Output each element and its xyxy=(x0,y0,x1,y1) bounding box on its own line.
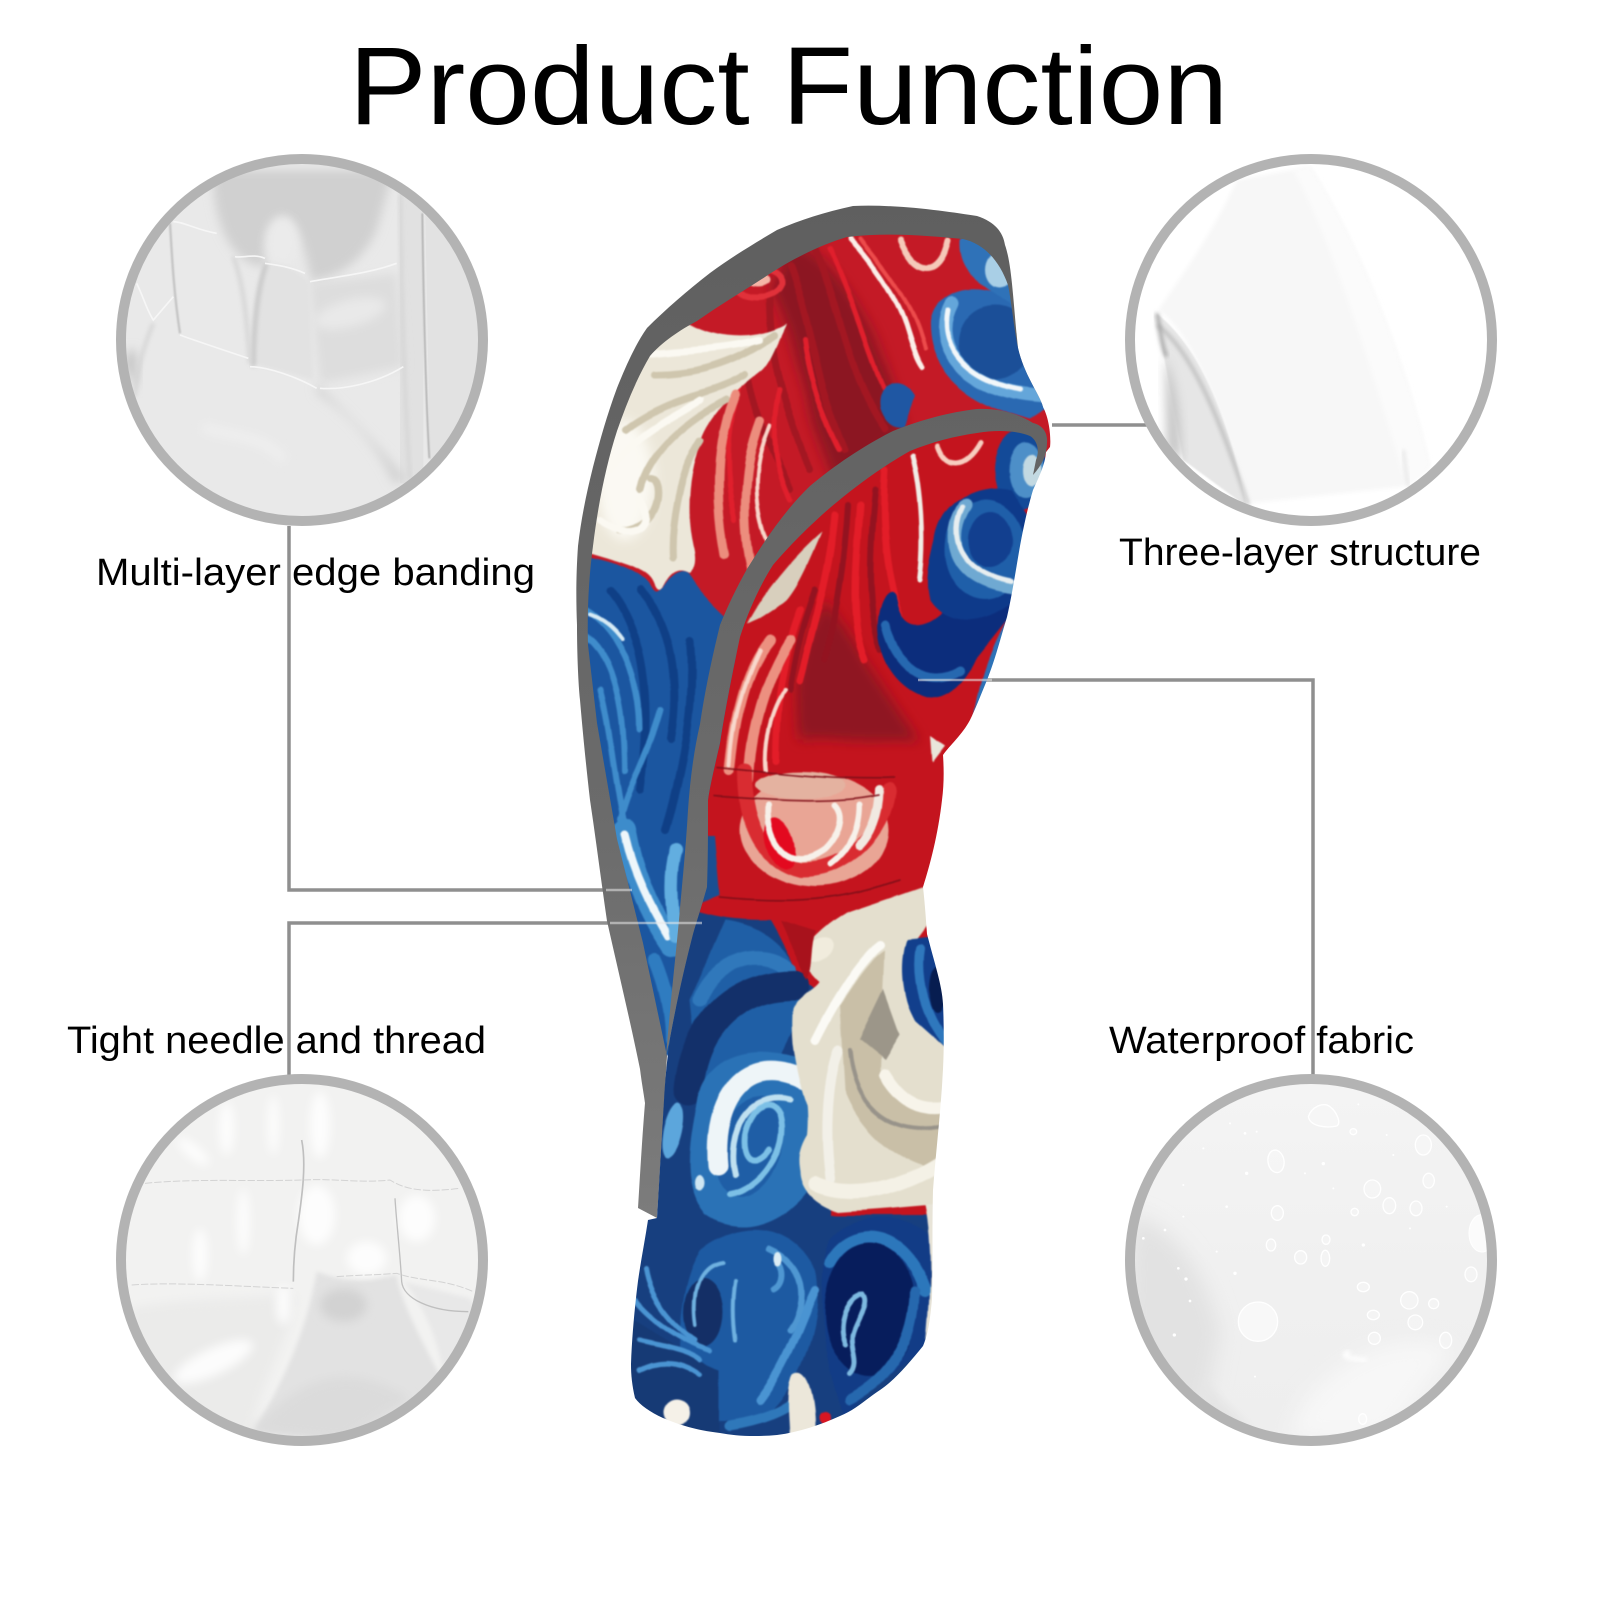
label: multi-layer edge banding: Multi-layer edge banding xyxy=(96,552,535,594)
back panel edge band xyxy=(576,206,1043,1218)
detail circle: multi-layer edge banding xyxy=(121,159,483,521)
front panel fabric print and lower body xyxy=(631,432,1046,1436)
leader line: tight needle and thread xyxy=(289,923,610,1075)
back panel fabric print xyxy=(588,234,1050,1056)
label: three-layer structure: Three-layer structure xyxy=(1119,532,1481,574)
faint line overlay on product xyxy=(606,680,992,923)
leader line: three-layer structure xyxy=(1052,423,1152,427)
detail circle: three-layer structure xyxy=(1130,159,1492,521)
front panel edge band xyxy=(666,409,1047,1056)
label: waterproof fabric: Waterproof fabric xyxy=(1109,1020,1414,1062)
product: swirl-patterned golf headcover xyxy=(560,200,1070,1460)
detail circle: tight needle and thread xyxy=(121,1079,487,1442)
leader line: waterproof fabric xyxy=(986,680,1313,1075)
label: tight needle and thread: Tight needle and thread xyxy=(67,1020,486,1062)
detail circle: waterproof fabric xyxy=(1127,1079,1494,1441)
leader line: multi-layer edge banding xyxy=(289,526,606,890)
title: Product Function xyxy=(349,25,1228,148)
